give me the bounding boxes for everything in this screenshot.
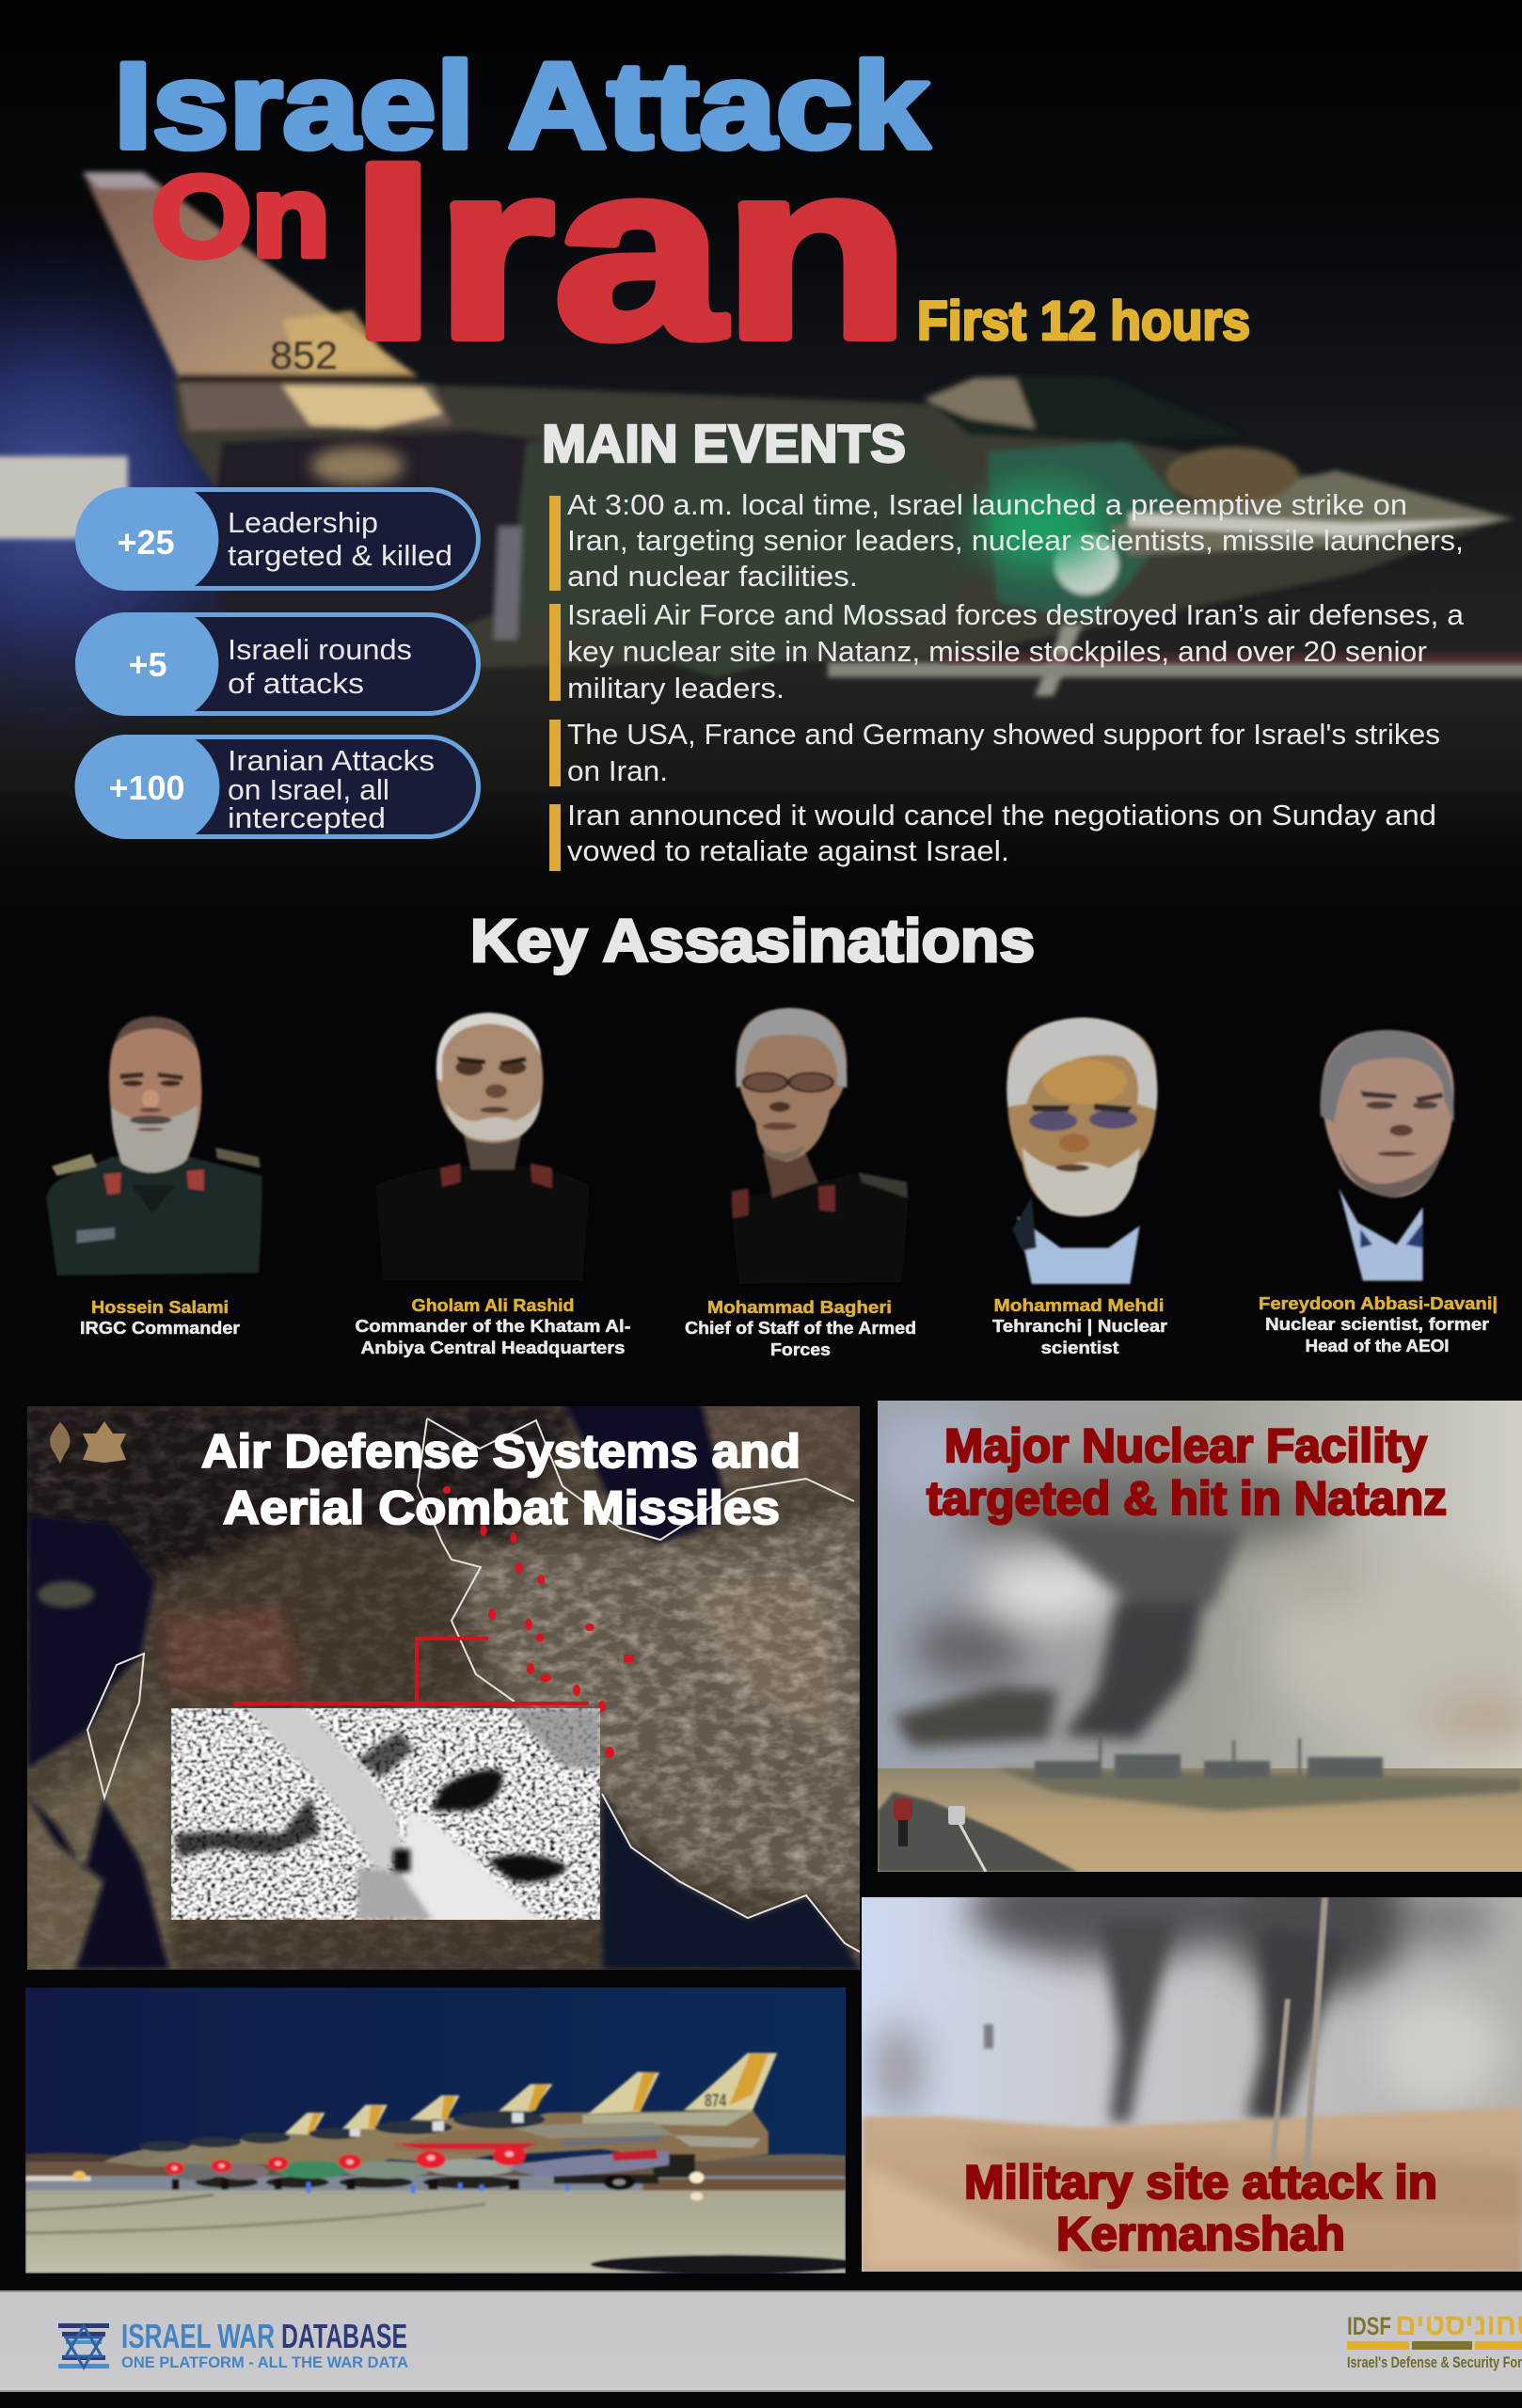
logo: Israel War Database: DATABASE [281, 2317, 407, 2355]
logo: Israel War Database: ISRAEL WAR [121, 2317, 275, 2355]
caption: Mohammad Mehdi Tehranchi: scientist [1040, 1339, 1119, 1357]
caption: Fereydoon Abbasi-Davani: Fereydoon Abbasi-Davani| [1259, 1294, 1498, 1313]
event 3: The USA, France and Germany showed support for Israel's strikes [567, 718, 1440, 751]
panel: satellite map of air defense strikes [19, 1402, 865, 1975]
event 4: Iran announced it would cancel the negotiations on Sunday and [567, 799, 1436, 832]
caption: Mohammad Mehdi Tehranchi: Tehranchi | Nuclear [992, 1317, 1167, 1336]
event 1: and nuclear facilities. [567, 560, 858, 593]
stat pill: +5 rounds: +5 [128, 645, 167, 684]
title word: On: On [151, 152, 330, 280]
caption: Gholam Ali Rashid [356, 1296, 631, 1357]
caption: Gholam Ali Rashid: Anbiya Central Headquarters [361, 1339, 625, 1357]
callout connector lines [233, 1639, 589, 1703]
event 2 [549, 598, 1465, 705]
stat pill: +25 leadership: +25 [117, 523, 175, 562]
Natanz title [927, 1419, 1447, 1525]
caption: Fereydoon Abbasi-Davani: Nuclear scientist, former [1265, 1315, 1489, 1334]
event 3 [549, 718, 1440, 787]
caption: Fereydoon Abbasi-Davani [1259, 1294, 1498, 1355]
rider and car on the road [894, 1798, 965, 1846]
background photo: fighter jet at night [0, 0, 1522, 908]
caption: Mohammad Mehdi Tehranchi [992, 1296, 1167, 1357]
event 1 [549, 488, 1464, 593]
caption: Hossein Salami [80, 1298, 240, 1338]
logo: IDSF [1347, 2307, 1522, 2371]
map markers: strike locations [443, 1486, 634, 1758]
stat pill: +100 attacks: Iranian Attacks [228, 744, 435, 777]
subtitle: First 12 hours: First 12 hours [917, 291, 1250, 352]
panel: Natanz nuclear facility photo [874, 1401, 1522, 1872]
title [114, 37, 1250, 390]
portrait: Hossein Salami [46, 1017, 262, 1275]
tail number 852: 852 [270, 333, 338, 377]
heading: main events: MAIN EVENTS [542, 414, 906, 474]
caption: Gholam Ali Rashid: Gholam Ali Rashid [412, 1296, 574, 1315]
portrait: Gholam Ali Rashid [375, 1013, 590, 1281]
event 2: key nuclear site in Natanz, missile stockpiles, and over 20 senior [567, 635, 1427, 668]
Kermanshah title: Kermanshah [1056, 2208, 1345, 2260]
map title [201, 1425, 801, 1534]
Natanz title: targeted & hit in Natanz [927, 1472, 1447, 1525]
caption: Hossein Salami: Hossein Salami [91, 1298, 229, 1317]
title word: Iran: Iran [351, 112, 910, 390]
event 2: Israeli Air Force and Mossad forces destroyed Iran’s air defenses, a [567, 598, 1465, 631]
event 2: military leaders. [567, 672, 785, 705]
logo: Israel War Database: ONE PLATFORM - ALL THE WAR DATA [121, 2353, 408, 2371]
panel: portraits [46, 1008, 1454, 1284]
Kermanshah title [964, 2156, 1437, 2260]
icon: star of David stripes [58, 2323, 109, 2368]
stat pill: +100 attacks: intercepted [228, 801, 386, 834]
event 3: on Iran. [567, 754, 668, 787]
logo: IDSF: IDSF [1347, 2312, 1391, 2340]
panel: row of F-16 jets photo: 874 [705, 2090, 726, 2111]
panel: row of F-16 jets photo [25, 1988, 846, 2273]
panel: main events list [549, 488, 1465, 871]
caption: Mohammad Mehdi Tehranchi: Mohammad Mehdi [993, 1296, 1165, 1315]
caption: Fereydoon Abbasi-Davani: Head of the AEOI [1306, 1337, 1449, 1355]
stat pill: +100 attacks: +100 [108, 768, 185, 807]
stat pill: +100 attacks [75, 735, 478, 839]
event 4: vowed to retaliate against Israel. [567, 834, 1009, 867]
event 1: Iran, targeting senior leaders, nuclear scientists, missile launchers, [567, 524, 1464, 557]
panel: stat pills [75, 487, 478, 839]
portrait: Mohammad Bagheri [729, 1008, 910, 1284]
icon: IDF unit emblems [50, 1421, 126, 1464]
inset: satellite image of strike [171, 1708, 600, 1920]
panel: names and roles [80, 1294, 1498, 1359]
caption: Mohammad Bagheri: Mohammad Bagheri [707, 1298, 892, 1317]
stat pill: +25 leadership [75, 487, 478, 591]
caption: Hossein Salami: IRGC Commander [80, 1319, 240, 1338]
Natanz title: Major Nuclear Facility [944, 1419, 1427, 1472]
stat pill: +25 leadership: Leadership [228, 506, 378, 539]
stat pill: +100 attacks: on Israel, all [228, 773, 389, 806]
stat pill: +5 rounds [75, 612, 478, 716]
caption: Mohammad Bagheri: Forces [770, 1340, 831, 1359]
portrait: Mohammad Mehdi Tehranchi [1007, 1018, 1157, 1284]
stat pill: +25 leadership: targeted & killed [228, 539, 452, 572]
footer bar [0, 2290, 1522, 2392]
title line: Israel Attack: Israel Attack [114, 37, 930, 174]
stat pill: +5 rounds: of attacks [228, 667, 364, 700]
event 1: At 3:00 a.m. local time, Israel launched a preemptive strike on [567, 488, 1407, 521]
panel: Kermanshah military site photo [862, 1844, 1522, 2272]
Kermanshah title: Military site attack in [964, 2156, 1437, 2209]
logo: Israel War Database [58, 2317, 408, 2371]
event 4 [549, 799, 1436, 871]
caption: Mohammad Bagheri [685, 1298, 916, 1359]
portrait: Fereydoon Abbasi-Davani [1320, 1030, 1454, 1281]
map title: Air Defense Systems and [201, 1425, 801, 1478]
stat pill: +5 rounds: Israeli rounds [228, 633, 412, 666]
caption: Gholam Ali Rashid: Commander of the Khatam Al- [356, 1317, 631, 1336]
heading: key assassinations: Key Assasinations [470, 907, 1035, 974]
caption: Mohammad Bagheri: Chief of Staff of the Armed [685, 1319, 916, 1338]
map title: Aerial Combat Missiles [223, 1481, 780, 1534]
